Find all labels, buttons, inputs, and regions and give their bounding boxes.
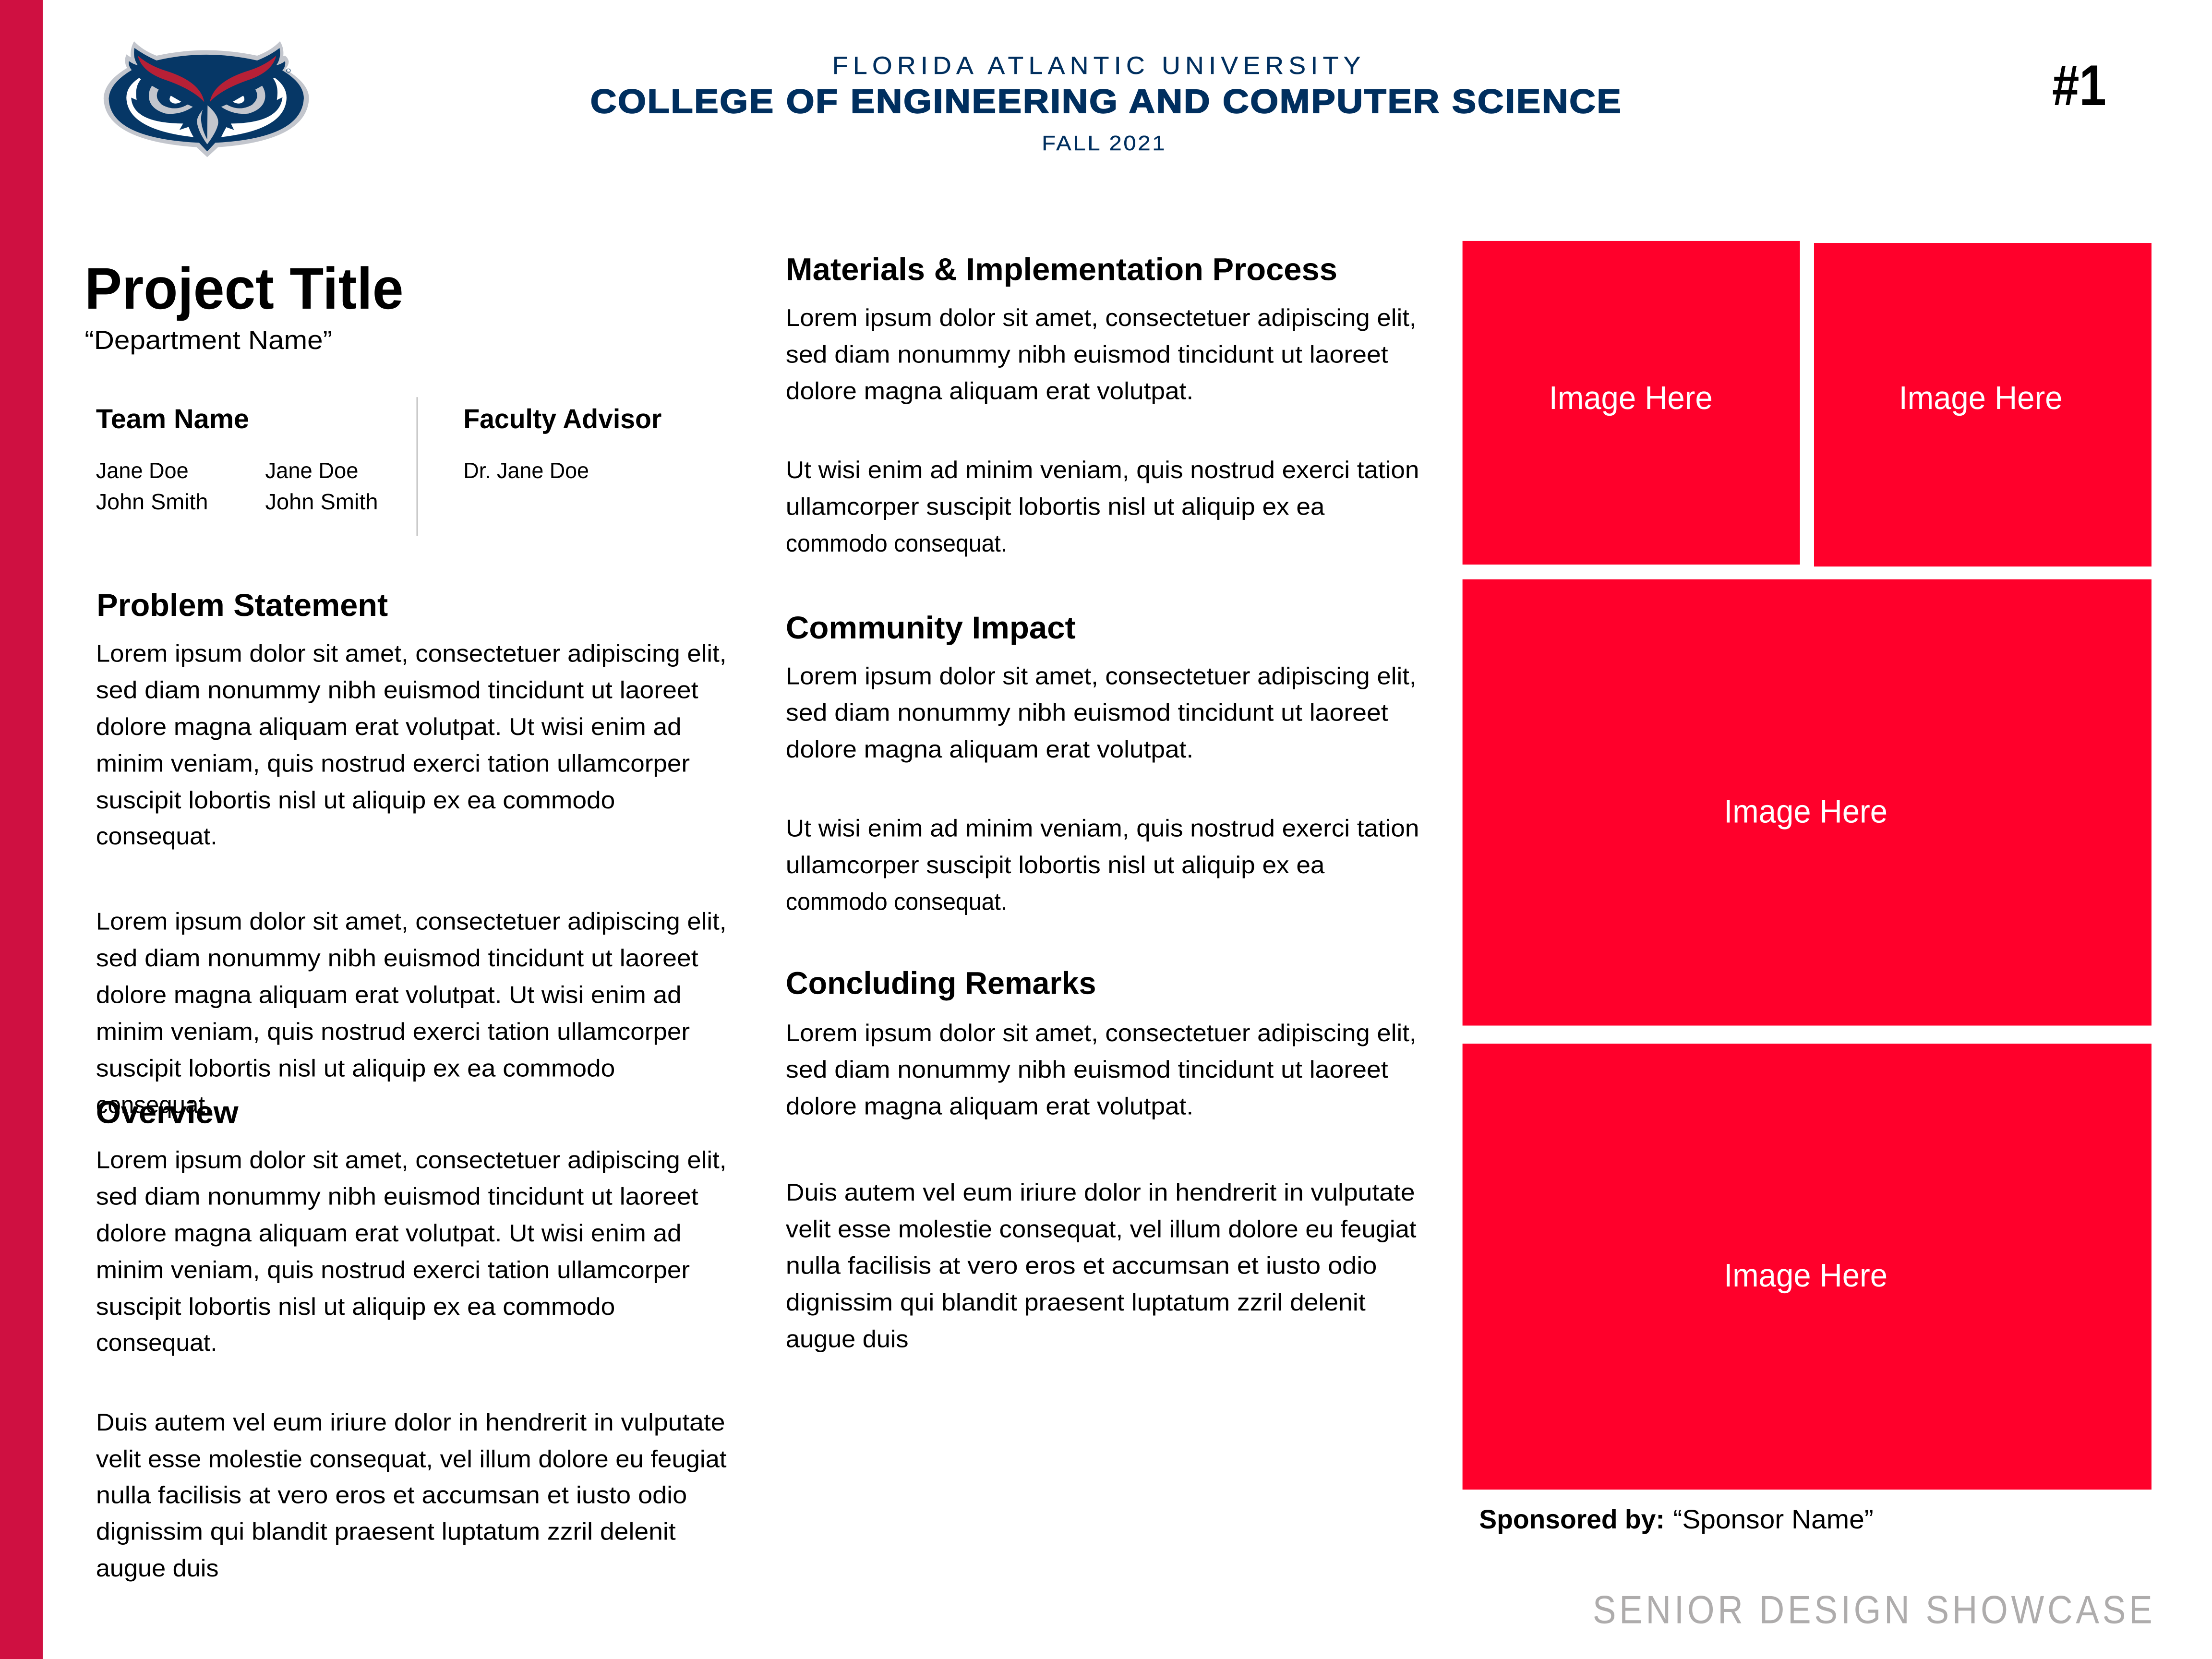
overview paragraph 1: minim veniam, quis nostrud exerci tation ullamcorper	[96, 1256, 690, 1284]
semester: FALL 2021	[1042, 133, 1166, 156]
college name: COLLEGE OF ENGINEERING AND COMPUTER SCIENCE	[590, 83, 1623, 121]
problem statement paragraph 2: dolore magna aliquam erat volutpat. Ut wisi enim ad	[96, 980, 681, 1009]
sponsor line: Sponsored by:	[1479, 1506, 1665, 1536]
problem statement paragraph 1: consequat.	[96, 822, 217, 850]
overview paragraph 2: Duis autem vel eum iriure dolor in hendrerit in vulputate	[96, 1408, 725, 1436]
community impact paragraph 2	[786, 814, 1419, 915]
image placeholder 4: Image Here	[1724, 1257, 1887, 1294]
problem statement paragraph 1: sed diam nonummy nibh euismod tincidunt ut laoreet	[96, 676, 698, 704]
advisor name: Dr. Jane Doe	[463, 460, 589, 484]
materials paragraph 2: Ut wisi enim ad minim veniam, quis nostrud exerci tation	[786, 456, 1419, 484]
panel: concluding remarks	[786, 966, 1417, 1353]
concluding remarks paragraph 2: nulla facilisis at vero eros et accumsan et iusto odio	[786, 1251, 1377, 1279]
team members: Jane Doe	[265, 460, 359, 484]
community impact paragraph 1: dolore magna aliquam erat volutpat.	[786, 735, 1193, 763]
problem statement paragraph 1: dolore magna aliquam erat volutpat. Ut wisi enim ad	[96, 712, 681, 741]
overview paragraph 2	[96, 1408, 727, 1582]
materials paragraph 2: commodo consequat.	[786, 529, 1007, 557]
materials heading: Materials & Implementation Process	[786, 252, 1337, 287]
left crimson sidebar	[0, 0, 43, 1659]
image placeholder 4	[1463, 1044, 2152, 1490]
concluding remarks paragraph 1: sed diam nonummy nibh euismod tincidunt ut laoreet	[786, 1055, 1388, 1083]
concluding remarks paragraph 2	[786, 1178, 1417, 1353]
community impact paragraph 1: Lorem ipsum dolor sit amet, consectetuer adipiscing elit,	[786, 661, 1417, 690]
overview paragraph 1: suscipit lobortis nisl ut aliquip ex ea commodo	[96, 1292, 615, 1321]
materials paragraph 1: Lorem ipsum dolor sit amet, consectetuer adipiscing elit,	[786, 303, 1417, 332]
problem statement paragraph 1	[96, 639, 726, 850]
overview paragraph 1	[96, 1145, 726, 1357]
materials paragraph 1: dolore magna aliquam erat volutpat.	[786, 377, 1193, 405]
problem statement paragraph 2: minim veniam, quis nostrud exerci tation ullamcorper	[96, 1017, 690, 1046]
community impact paragraph 2: ullamcorper suscipit lobortis nisl ut aliquip ex ea	[786, 851, 1325, 879]
community impact paragraph 1	[786, 661, 1417, 763]
image placeholder 2: Image Here	[1899, 379, 2062, 416]
problem statement paragraph 2: Lorem ipsum dolor sit amet, consectetuer adipiscing elit,	[96, 907, 726, 935]
panel: materials and implementation process	[786, 252, 1419, 557]
problem statement heading: Problem Statement	[96, 588, 389, 623]
problem statement paragraph 2: sed diam nonummy nibh euismod tincidunt ut laoreet	[96, 944, 698, 972]
community impact paragraph 2: Ut wisi enim ad minim veniam, quis nostrud exerci tation	[786, 814, 1419, 842]
showcase label: SENIOR DESIGN SHOWCASE	[1593, 1588, 2155, 1632]
image placeholder 1: Image Here	[1549, 379, 1713, 416]
overview paragraph 2: nulla facilisis at vero eros et accumsan et iusto odio	[96, 1480, 687, 1509]
overview paragraph 2: dignissim qui blandit praesent luptatum zzril delenit	[96, 1517, 676, 1545]
problem statement paragraph 2: suscipit lobortis nisl ut aliquip ex ea commodo	[96, 1054, 615, 1082]
concluding remarks paragraph 1: dolore magna aliquam erat volutpat.	[786, 1092, 1193, 1120]
concluding remarks paragraph 2: dignissim qui blandit praesent luptatum zzril delenit	[786, 1288, 1366, 1316]
overview paragraph 2: augue duis	[96, 1554, 219, 1582]
community impact paragraph 2: commodo consequat.	[786, 887, 1007, 915]
problem statement paragraph 1: suscipit lobortis nisl ut aliquip ex ea commodo	[96, 786, 615, 814]
materials paragraph 1: sed diam nonummy nibh euismod tincidunt ut laoreet	[786, 340, 1388, 368]
image placeholder 1	[1463, 241, 1800, 565]
faculty advisor heading: Faculty Advisor	[463, 404, 662, 435]
overview paragraph 1: Lorem ipsum dolor sit amet, consectetuer adipiscing elit,	[96, 1145, 726, 1174]
overview paragraph 1: dolore magna aliquam erat volutpat. Ut wisi enim ad	[96, 1219, 681, 1247]
overview paragraph 2: velit esse molestie consequat, vel illum dolore eu feugiat	[96, 1444, 727, 1473]
image placeholder 3	[1463, 579, 2152, 1025]
concluding remarks heading: Concluding Remarks	[786, 966, 1096, 1001]
sponsor line: “Sponsor Name”	[1673, 1506, 1874, 1536]
sponsor line	[1479, 1506, 1874, 1536]
problem statement paragraph 1: Lorem ipsum dolor sit amet, consectetuer adipiscing elit,	[96, 639, 726, 667]
team members	[96, 460, 378, 515]
panel: team and advisor	[96, 397, 662, 536]
overview paragraph 1: sed diam nonummy nibh euismod tincidunt ut laoreet	[96, 1182, 698, 1210]
department name: “Department Name”	[84, 325, 332, 355]
materials paragraph 2	[786, 456, 1419, 557]
problem statement paragraph 2: consequat.	[96, 1091, 212, 1118]
community impact heading: Community Impact	[786, 610, 1076, 645]
university name: FLORIDA ATLANTIC UNIVERSITY	[832, 51, 1366, 80]
problem statement paragraph 1: minim veniam, quis nostrud exerci tation ullamcorper	[96, 749, 690, 777]
icon: FAU owl logo	[104, 41, 309, 157]
overview paragraph 1: consequat.	[96, 1328, 217, 1357]
image placeholder 2	[1814, 243, 2152, 566]
project title: Project Title	[84, 255, 403, 321]
concluding remarks paragraph 2: Duis autem vel eum iriure dolor in hendrerit in vulputate	[786, 1178, 1415, 1206]
team members: Jane Doe	[96, 460, 189, 484]
poster number: #1	[2052, 53, 2106, 118]
panel: overview	[96, 1094, 727, 1582]
image placeholder 3: Image Here	[1724, 793, 1887, 830]
concluding remarks paragraph 2: augue duis	[786, 1325, 909, 1353]
concluding remarks paragraph 2: velit esse molestie consequat, vel illum dolore eu feugiat	[786, 1214, 1417, 1243]
team members: John Smith	[265, 491, 378, 515]
header text block	[590, 51, 1623, 156]
team name heading: Team Name	[96, 404, 250, 435]
team members: John Smith	[96, 491, 208, 515]
concluding remarks paragraph 1: Lorem ipsum dolor sit amet, consectetuer adipiscing elit,	[786, 1019, 1417, 1047]
community impact paragraph 1: sed diam nonummy nibh euismod tincidunt ut laoreet	[786, 698, 1388, 726]
problem statement paragraph 2	[96, 907, 726, 1118]
panel: problem statement	[96, 588, 726, 1118]
materials paragraph 1	[786, 303, 1417, 405]
concluding remarks paragraph 1	[786, 1019, 1417, 1120]
overview heading: Overview	[96, 1094, 239, 1130]
materials paragraph 2: ullamcorper suscipit lobortis nisl ut aliquip ex ea	[786, 493, 1325, 520]
panel: community impact	[786, 610, 1419, 915]
